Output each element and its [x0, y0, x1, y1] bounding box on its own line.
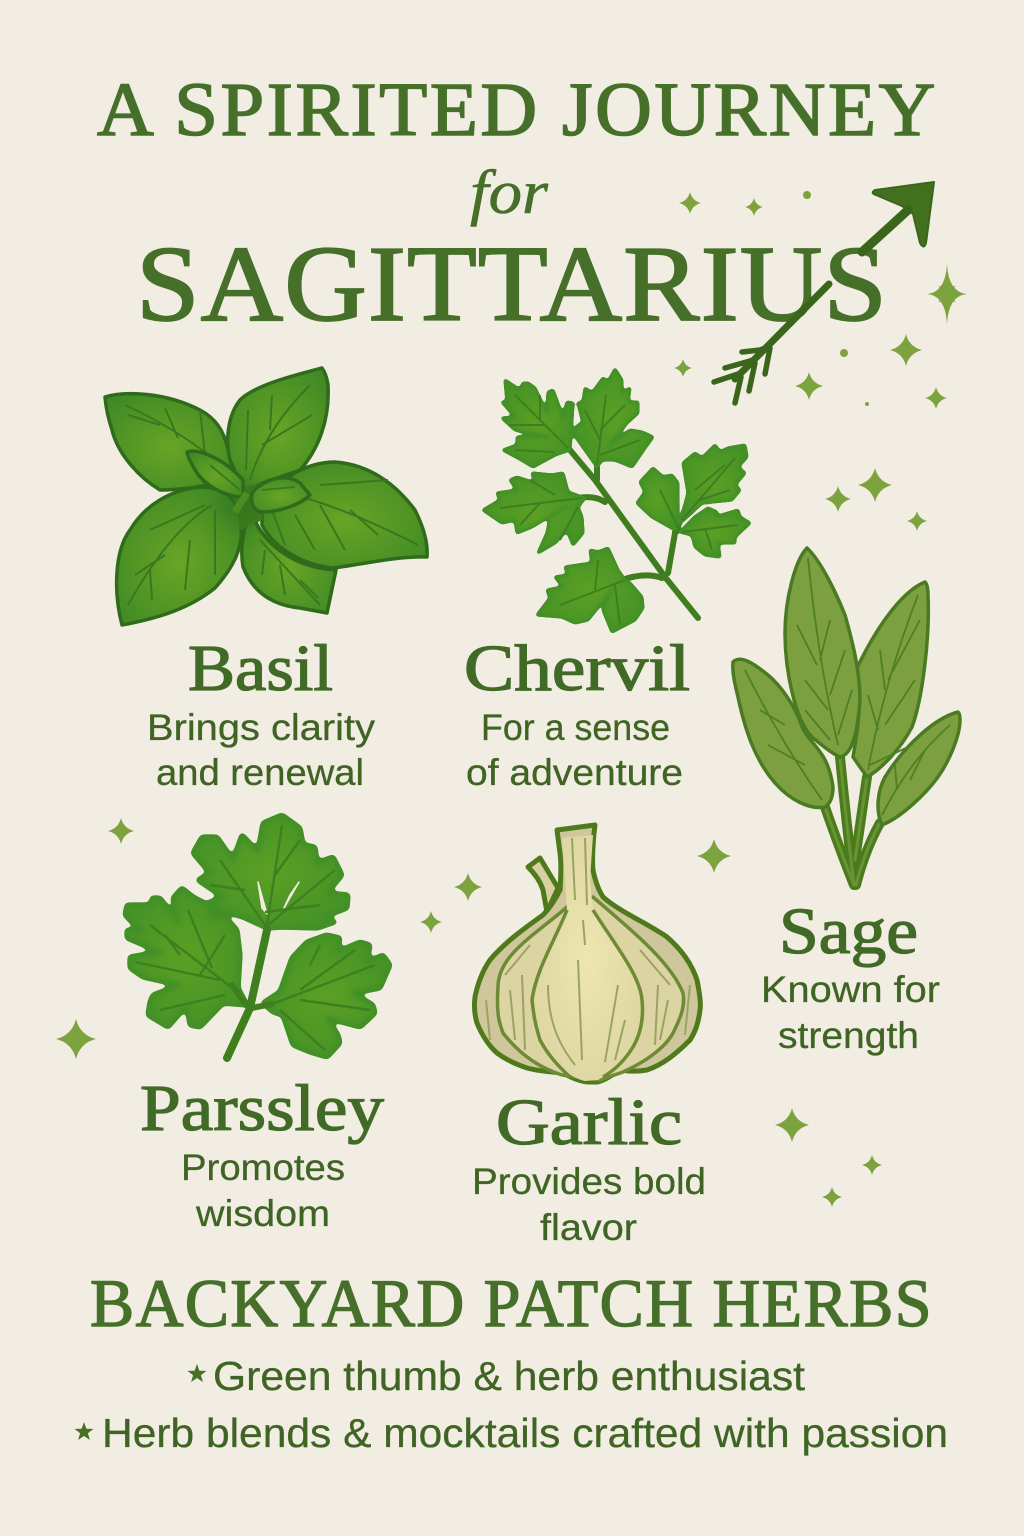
- footer line one with star bullet: Green thumb & herb enthusiast: [213, 1353, 806, 1399]
- icon: parsley sprig: [125, 815, 390, 1058]
- title: [97, 68, 938, 344]
- icon: basil leaves: [105, 368, 427, 625]
- herb name: sage: Sage: [779, 895, 918, 968]
- title line: sagittarius: SAGITTARIUS: [136, 225, 888, 344]
- herb name: garlic: Garlic: [496, 1086, 682, 1159]
- herb name: basil: Basil: [188, 632, 333, 705]
- description: chervil: [466, 707, 683, 793]
- description: sage: strength: [778, 1015, 919, 1056]
- description: sage: Known for: [761, 969, 940, 1010]
- panel: sage: [733, 548, 960, 1056]
- description: parsley: wisdom: [195, 1193, 330, 1234]
- description: chervil: For a sense: [481, 707, 670, 748]
- icon: garlic bulb: [474, 825, 700, 1082]
- description: garlic: [472, 1161, 706, 1248]
- icon: sage leaves: [733, 548, 960, 885]
- description: basil: Brings clarity: [147, 707, 376, 748]
- description: garlic: flavor: [540, 1207, 637, 1248]
- title line: for: for: [470, 159, 549, 227]
- footer: [74, 1265, 948, 1456]
- panel: garlic: [472, 825, 706, 1248]
- footer heading: BACKYARD PATCH HERBS: [90, 1265, 933, 1341]
- description: chervil: of adventure: [466, 752, 683, 793]
- panel: chervil: [464, 369, 750, 793]
- description: garlic: Provides bold: [472, 1161, 706, 1202]
- footer line two with star bullet: Herb blends & mocktails crafted with passion: [102, 1410, 948, 1456]
- panel: parsley: [125, 815, 390, 1234]
- panel: basil: [105, 368, 427, 793]
- icon: chervil sprig: [483, 369, 750, 632]
- description: basil: and renewal: [156, 752, 364, 793]
- sparkles around the arrow and herbs: [56, 191, 967, 1207]
- description: parsley: Promotes: [181, 1147, 345, 1188]
- icon: sagittarius arrow: [714, 182, 934, 403]
- title line: a spirited journey: A SPIRITED JOURNEY: [97, 68, 938, 152]
- herb name: chervil: Chervil: [464, 632, 690, 705]
- description: parsley: [181, 1147, 345, 1234]
- description: basil: [147, 707, 376, 793]
- herb name: parsley: Parssley: [140, 1072, 384, 1145]
- description: sage: [761, 969, 940, 1056]
